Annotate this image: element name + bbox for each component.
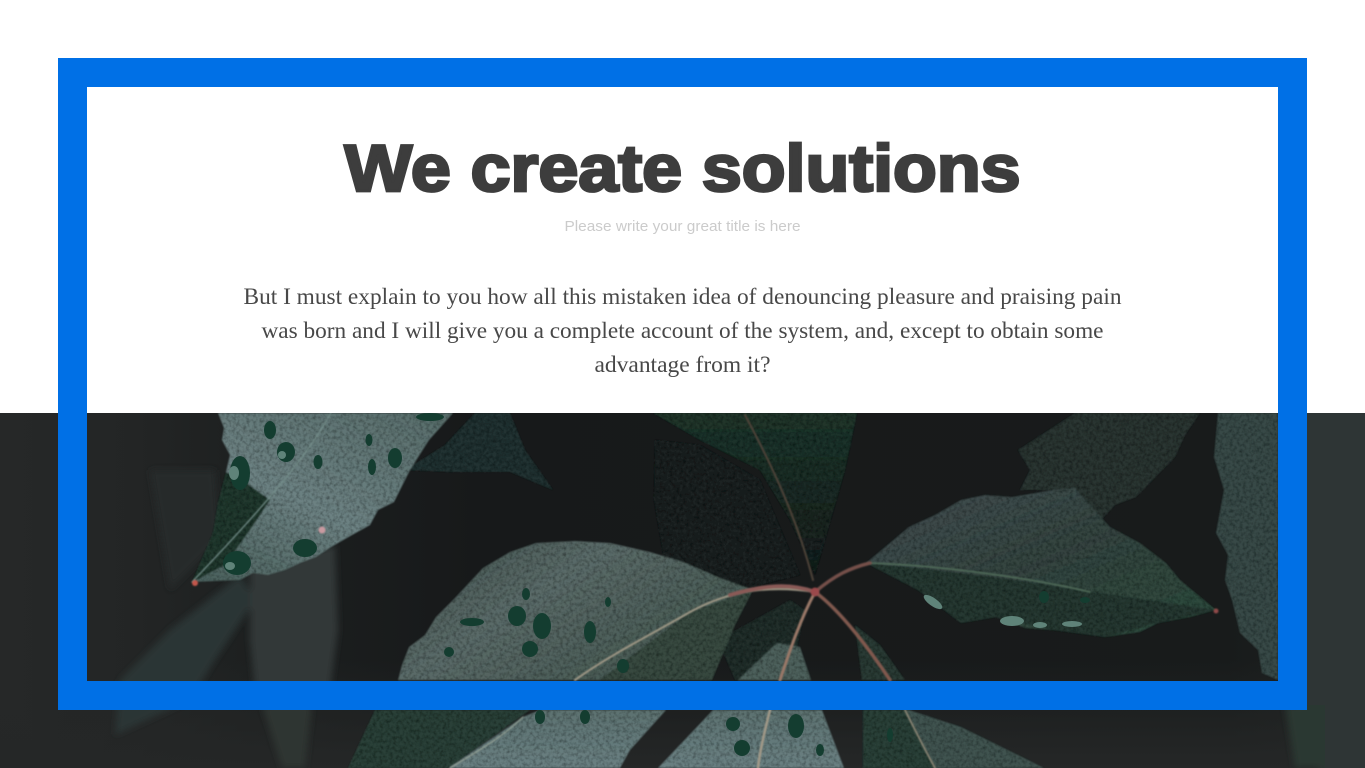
- leaf: bottom left dark: [348, 710, 530, 768]
- leaf: right main: [866, 488, 1216, 637]
- leaf: lower small: [738, 643, 811, 680]
- foreground leaves: [192, 413, 1278, 768]
- leaf: right edge: [1214, 413, 1278, 680]
- leaf: main centre: [398, 541, 753, 680]
- white panel above photo: [87, 87, 1278, 413]
- droplet highlights: [225, 451, 1082, 628]
- white background: [0, 0, 1365, 413]
- subtitle: Please write your great title is here: [564, 218, 800, 235]
- photo: wet dark green leaves: [0, 400, 1365, 768]
- body paragraph: advantage from it?: [594, 352, 770, 377]
- leaf stems: [192, 413, 1218, 768]
- leaf: upper centre-left dark: [405, 413, 553, 490]
- water droplets: [223, 413, 1090, 756]
- body paragraph: [244, 284, 1122, 377]
- leaf: bottom centre: [658, 710, 844, 768]
- body paragraph: But I must explain to you how all this mistaken idea of denouncing pleasure and praising pain: [244, 284, 1122, 309]
- title: We create solutions: [344, 131, 1020, 205]
- leaf: upper right: [1018, 413, 1200, 520]
- body paragraph: was born and I will give you a complete account of the system, and, except to obtain some: [262, 318, 1104, 343]
- leaf: centre small dark: [718, 600, 805, 680]
- leaf: centre dark lower: [654, 440, 800, 600]
- blurred background leaves: [115, 400, 1365, 768]
- leaf: top left: [192, 413, 453, 582]
- leaf: centre dark upper: [653, 413, 857, 575]
- leaf: bottom right: [906, 710, 1043, 768]
- blue frame: [72, 72, 1292, 696]
- leaf: bottom left light: [449, 710, 666, 768]
